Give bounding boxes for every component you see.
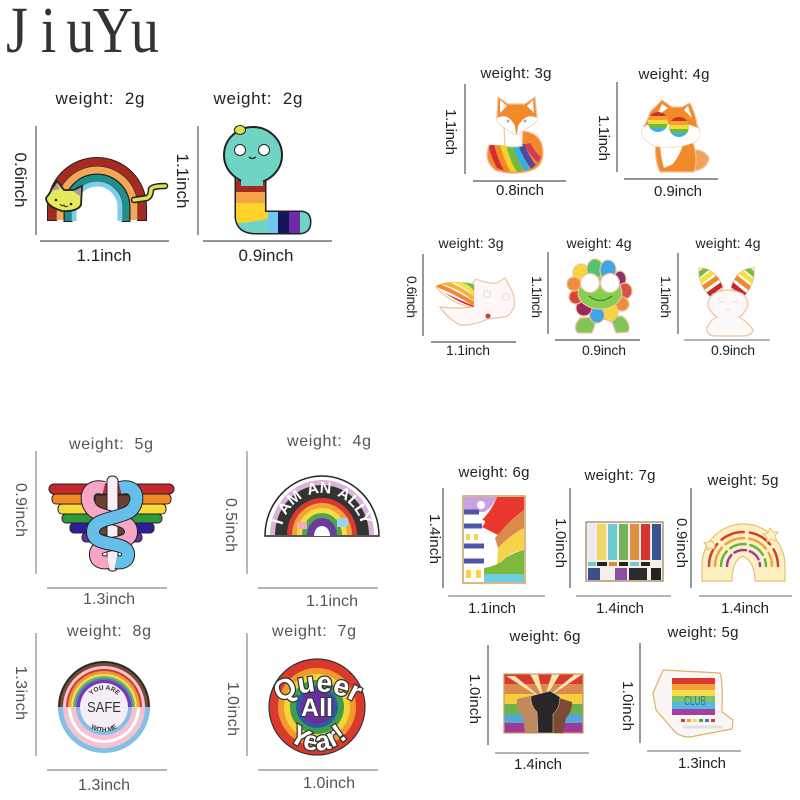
width line (258, 769, 378, 771)
height label: 1.0inch (466, 674, 483, 724)
width label: 1.4inch (596, 600, 644, 617)
width label: 1.1inch (76, 246, 132, 265)
product: raised fists (466, 628, 589, 773)
pin: ally rainbow: I AM AN ALLY (272, 482, 372, 524)
height label: 0.6inch (404, 276, 420, 318)
width label: 1.0inch (303, 775, 355, 792)
width line (495, 752, 589, 754)
weight label: weight: 5g (706, 472, 778, 489)
weight label: weight: 6g (508, 628, 580, 645)
product: book window (426, 464, 545, 617)
height label: 1.3inch (12, 666, 29, 720)
weight label: weight: 2g (54, 89, 144, 108)
width line (448, 595, 545, 597)
pin: bunny (695, 266, 758, 336)
pin: ally rainbow (264, 475, 380, 537)
width label: 1.3inch (678, 755, 726, 772)
pin: book (463, 496, 525, 583)
height label: 0.9inch (673, 518, 690, 568)
product: you are safe with me (12, 623, 167, 794)
pin: frog (567, 259, 632, 333)
screen text: CLUB (684, 693, 706, 708)
product: rainbow worm (173, 89, 332, 265)
pin: queer badge: Year! (292, 722, 348, 752)
weight label: weight: 7g (271, 623, 356, 640)
weight label: weight: 3g (438, 235, 504, 251)
weight label: weight: 4g (694, 235, 760, 251)
weight label: weight: 7g (584, 467, 656, 484)
pin: queer badge: All (301, 694, 333, 722)
height label: 1.0inch (552, 518, 569, 568)
width label: 1.1inch (306, 593, 358, 610)
height label: 1.1inch (529, 276, 545, 318)
weight label: weight: 3g (480, 65, 552, 82)
badge text: Queer (274, 675, 364, 703)
badge text: SAFE (87, 699, 121, 716)
width label: 1.1inch (468, 600, 516, 617)
width line (431, 341, 516, 343)
width label: 1.4inch (514, 756, 562, 773)
width label: 1.1inch (446, 342, 490, 358)
pin: safe badge: WITH ME (92, 724, 117, 732)
product: white cat with rainbow tail (404, 235, 516, 358)
weight label: weight: 8g (66, 623, 151, 640)
width label: 0.9inch (238, 246, 294, 265)
width line (258, 587, 378, 589)
product: caduceus snakes wings (12, 436, 174, 608)
weight label: weight: 4g (638, 66, 710, 83)
width label: 1.3inch (78, 777, 130, 794)
pin: fists (504, 674, 583, 733)
product: rainbow computer (619, 624, 741, 772)
height label: 1.1inch (173, 154, 192, 208)
weight label: weight: 2g (212, 89, 302, 108)
width line (624, 178, 718, 180)
pin: computer (653, 670, 733, 737)
width label: 1.4inch (721, 600, 769, 617)
product: color bars (552, 467, 671, 617)
height line (677, 253, 679, 334)
pin: shiba (642, 100, 709, 172)
weight label: weight: 4g (566, 235, 632, 251)
width line (684, 339, 770, 341)
height line (569, 488, 571, 588)
product: rainbow cat (11, 89, 169, 265)
product: shiba with rainbow glasses (595, 66, 718, 200)
pin: bars (586, 522, 663, 581)
width label: 0.8inch (496, 182, 544, 199)
pin: queer badge (268, 658, 366, 756)
width line (473, 180, 566, 182)
pin: safe badge: YOU ARE (88, 685, 120, 696)
height line (422, 254, 424, 336)
height line (35, 451, 37, 574)
height line (197, 126, 199, 235)
height line (464, 84, 466, 174)
width line (555, 339, 640, 341)
width line (699, 595, 792, 597)
width label: 0.9inch (654, 183, 702, 200)
height label: 1.4inch (426, 514, 443, 564)
product: cream rainbow (673, 472, 792, 617)
product: queer all year (224, 623, 378, 792)
height label: 0.9inch (12, 483, 29, 537)
height label: 0.5inch (222, 498, 239, 552)
width label: 1.3inch (83, 591, 135, 608)
height label: 1.0inch (619, 681, 636, 731)
width line (647, 750, 741, 752)
product: fox (442, 65, 566, 199)
height line (547, 252, 549, 334)
product: I am an ally rainbow (222, 433, 380, 610)
width label: 0.9inch (711, 342, 755, 358)
weight label: weight: 6g (458, 464, 530, 481)
height line (35, 633, 37, 756)
height line (487, 645, 489, 745)
height line (246, 633, 248, 756)
width line (40, 240, 169, 242)
pin: safe badge (58, 661, 150, 753)
pin: rainbow cat (46, 162, 165, 222)
pin: worm (223, 125, 312, 234)
weight label: weight: 5g (666, 624, 738, 641)
height line (246, 451, 248, 574)
pin: cream rainbow (702, 524, 785, 581)
pin: fox (487, 97, 543, 178)
weight label: weight: 5g (68, 436, 153, 453)
height label: 1.1inch (658, 276, 674, 318)
height line (639, 643, 641, 743)
product: frog flower (529, 235, 640, 358)
width line (47, 587, 167, 589)
height line (35, 126, 37, 235)
pin: snakes (49, 476, 174, 571)
height label: 1.1inch (595, 115, 612, 161)
height line (442, 488, 444, 588)
height label: 1.0inch (224, 682, 241, 736)
weight label: weight: 4g (286, 433, 371, 450)
height label: 0.6inch (11, 152, 30, 208)
width line (576, 595, 671, 597)
height line (690, 488, 692, 588)
height label: 1.1inch (442, 109, 459, 155)
width line (203, 240, 332, 242)
width label: 0.9inch (582, 342, 626, 358)
product: rainbow-eared bunny (658, 235, 770, 358)
pin: white cat (436, 277, 514, 325)
height line (616, 82, 618, 172)
width line (47, 769, 167, 771)
